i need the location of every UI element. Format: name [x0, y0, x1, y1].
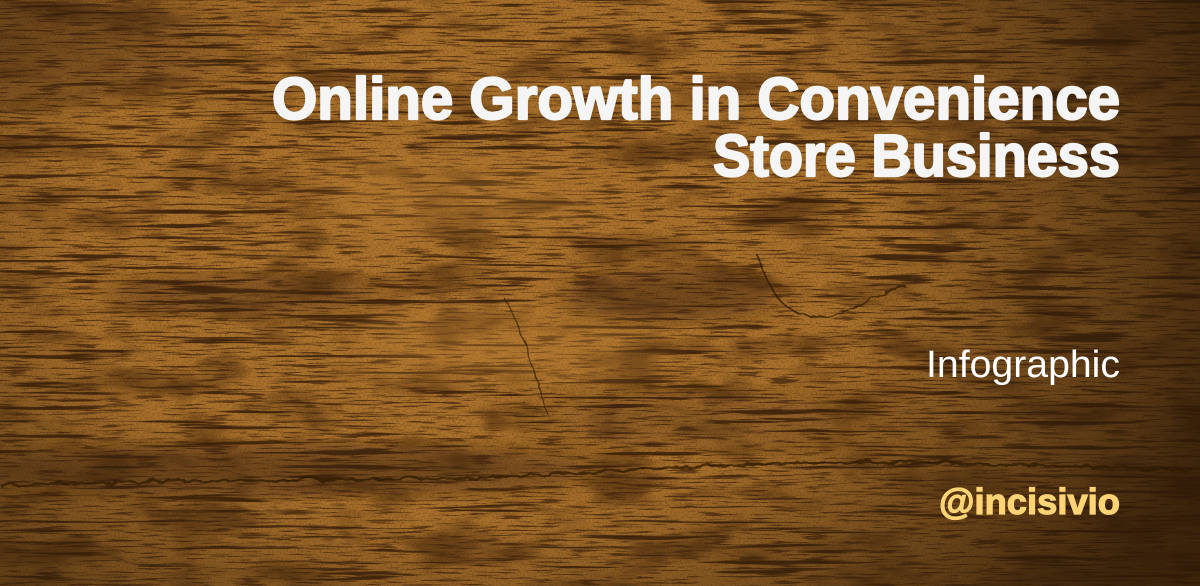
title: Online Growth in Convenience — [272, 66, 1120, 132]
title: Store Business — [713, 123, 1120, 189]
subtitle: Infographic — [926, 344, 1120, 386]
title — [272, 66, 1120, 189]
handle: @incisivio — [939, 481, 1120, 522]
